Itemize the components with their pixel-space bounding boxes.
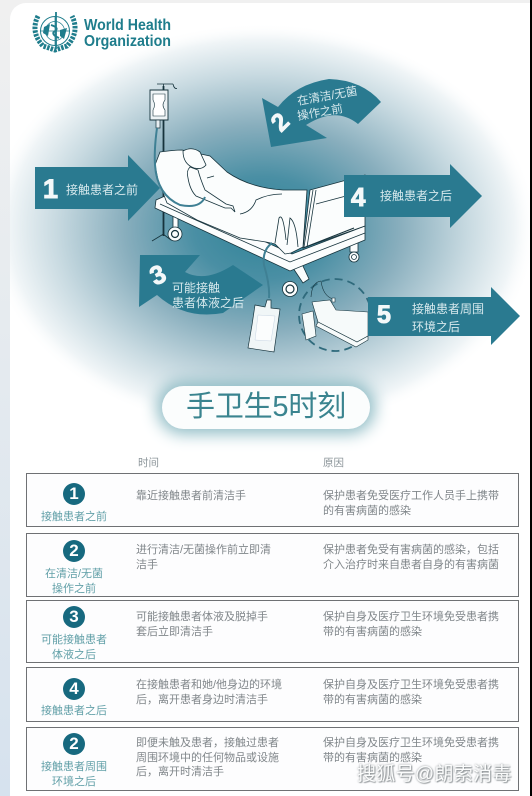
arrow 2: before clean/aseptic procedure bbox=[262, 79, 381, 147]
row 5 time: 周围环境中的任何物品或设施 bbox=[136, 752, 279, 764]
arrow 2: before clean/aseptic procedure: 操作之前 bbox=[296, 101, 344, 123]
drain tube and urine bag bbox=[248, 243, 280, 352]
number badge 4 bbox=[63, 678, 85, 700]
row 5 label: 环境之后 bbox=[52, 776, 96, 788]
arrow 1: before touching a patient: 接触患者之前 bbox=[66, 182, 138, 197]
row 5 label bbox=[41, 760, 107, 788]
number badge 4: 4 bbox=[69, 679, 79, 698]
row 3 reason: 保护自身及医疗卫生环境免受患者携 bbox=[323, 611, 499, 623]
arrow 3: after body fluid exposure risk: 3 bbox=[145, 258, 171, 291]
table row 4 bbox=[26, 667, 519, 722]
row 2 label: 操作之前 bbox=[52, 583, 96, 595]
table row 1 bbox=[26, 473, 519, 527]
row 4 reason: 带的有害病菌的感染 bbox=[323, 694, 422, 706]
row 5 label: 接触患者周围 bbox=[41, 761, 107, 773]
arrow 1: before touching a patient: 1 bbox=[43, 174, 58, 204]
illustration: five moments around the patient bed bbox=[10, 12, 520, 402]
IV tube bbox=[155, 128, 205, 206]
icon: small bed scene bbox=[302, 281, 368, 347]
row 2 reason: 保护患者免受有害病菌的感染，包括 bbox=[323, 544, 499, 556]
row 4 reason: 保护自身及医疗卫生环境免受患者携 bbox=[323, 679, 499, 691]
column heading: reason: 原因 bbox=[323, 457, 344, 469]
row 4 label: 接触患者之后 bbox=[41, 705, 107, 717]
WHO logo bbox=[35, 12, 171, 50]
title pill: 手卫生5时刻 bbox=[186, 391, 346, 423]
row 4 time: 后，离开患者身边时清洁手 bbox=[136, 694, 268, 706]
arrow 3: after body fluid exposure risk: 患者体液之后 bbox=[172, 295, 244, 310]
row 2 time: 洁手 bbox=[136, 558, 158, 570]
arrow 5: after touching patient surroundings: 接触患者周围 bbox=[412, 301, 484, 316]
dashed circle: patient surroundings bbox=[299, 279, 371, 351]
bed footboard bbox=[303, 175, 365, 248]
arrow 4: after touching a patient bbox=[344, 164, 482, 228]
row 3 label bbox=[41, 634, 107, 661]
number badge 5: 2 bbox=[69, 734, 79, 753]
row 1 reason bbox=[323, 490, 499, 516]
row 5 reason: 保护自身及医疗卫生环境免受患者携 bbox=[323, 737, 499, 749]
number badge 3 bbox=[63, 606, 85, 628]
number badge 1 bbox=[63, 483, 85, 505]
row 5 time bbox=[136, 736, 279, 778]
title pill bbox=[162, 386, 370, 429]
row 4 time: 在接触患者和她/他身边的环境 bbox=[136, 679, 282, 691]
column heading: time: 时间 bbox=[138, 457, 159, 469]
arrow 4: after touching a patient: 接触患者之后 bbox=[380, 188, 452, 203]
teal background glow bbox=[10, 35, 520, 402]
row 5 time: 即便未触及患者，接触过患者 bbox=[136, 737, 279, 749]
number badge 2 bbox=[63, 540, 85, 562]
row 2 label: 在清洁/无菌 bbox=[45, 568, 103, 580]
icon: IV stand and bag bbox=[150, 84, 177, 241]
row 2 time bbox=[136, 544, 271, 570]
row 5 reason bbox=[323, 736, 499, 764]
number badge 1: 1 bbox=[69, 484, 79, 503]
watermark: 搜狐号@朗索消毒 bbox=[357, 764, 512, 785]
bed sheet over the patient bbox=[155, 150, 307, 254]
wordmark: Organization bbox=[84, 33, 171, 50]
row 5 time: 后，离开时清洁手 bbox=[136, 766, 224, 778]
row 3 reason: 带的有害病菌的感染 bbox=[323, 626, 422, 638]
arrow 5: after touching patient surroundings: 5 bbox=[377, 301, 391, 329]
row 1 reason: 保护患者免受医疗工作人员手上携带 bbox=[323, 490, 499, 502]
number badge 5 bbox=[63, 733, 85, 755]
row 3 time: 可能接触患者体液及脱掉手 bbox=[136, 611, 268, 623]
row 2 reason bbox=[323, 544, 499, 570]
number badge 3: 3 bbox=[69, 607, 79, 626]
bed frame and wheels bbox=[155, 196, 365, 296]
row 1 reason: 的有害病菌的感染 bbox=[323, 504, 411, 516]
arrow 2: before clean/aseptic procedure: 2 bbox=[265, 108, 295, 137]
row 2 time: 进行清洁/无菌操作前立即清 bbox=[136, 544, 271, 556]
icon: WHO emblem bbox=[35, 12, 75, 50]
row 3 time: 套后立即清洁手 bbox=[136, 626, 213, 638]
row 3 reason bbox=[323, 610, 499, 638]
row 2 reason: 介入治疗时来自患者自身的有害病菌 bbox=[323, 558, 499, 570]
arrow 2: before clean/aseptic procedure: 在清洁/无菌 bbox=[296, 85, 358, 108]
table row 5 bbox=[26, 727, 519, 791]
wordmark: World Health bbox=[84, 17, 171, 34]
icon: patient bbox=[183, 149, 235, 212]
row 1 time: 靠近接触患者前清洁手 bbox=[136, 490, 246, 502]
table row 2 bbox=[26, 533, 519, 597]
row 2 label bbox=[45, 568, 103, 595]
number badge 2: 2 bbox=[69, 541, 79, 560]
row 3 label: 可能接触患者 bbox=[41, 634, 107, 646]
row 3 label: 体液之后 bbox=[52, 649, 96, 661]
table row 3 bbox=[26, 600, 519, 663]
row 3 time bbox=[136, 610, 268, 638]
arrow 3: after body fluid exposure risk bbox=[139, 255, 263, 315]
row 4 reason bbox=[323, 678, 499, 706]
row 1 label: 接触患者之前 bbox=[41, 511, 107, 523]
row 5 reason: 带的有害病菌的感染 bbox=[323, 752, 422, 764]
arrow 1: before touching a patient bbox=[35, 155, 160, 221]
arrow 3: after body fluid exposure risk: 可能接触 bbox=[172, 280, 220, 295]
row 4 time bbox=[136, 678, 282, 706]
arrow 5: after touching patient surroundings: 环境之后 bbox=[412, 319, 460, 334]
arrow 4: after touching a patient: 4 bbox=[351, 182, 366, 212]
arrow 5: after touching patient surroundings bbox=[368, 287, 520, 345]
